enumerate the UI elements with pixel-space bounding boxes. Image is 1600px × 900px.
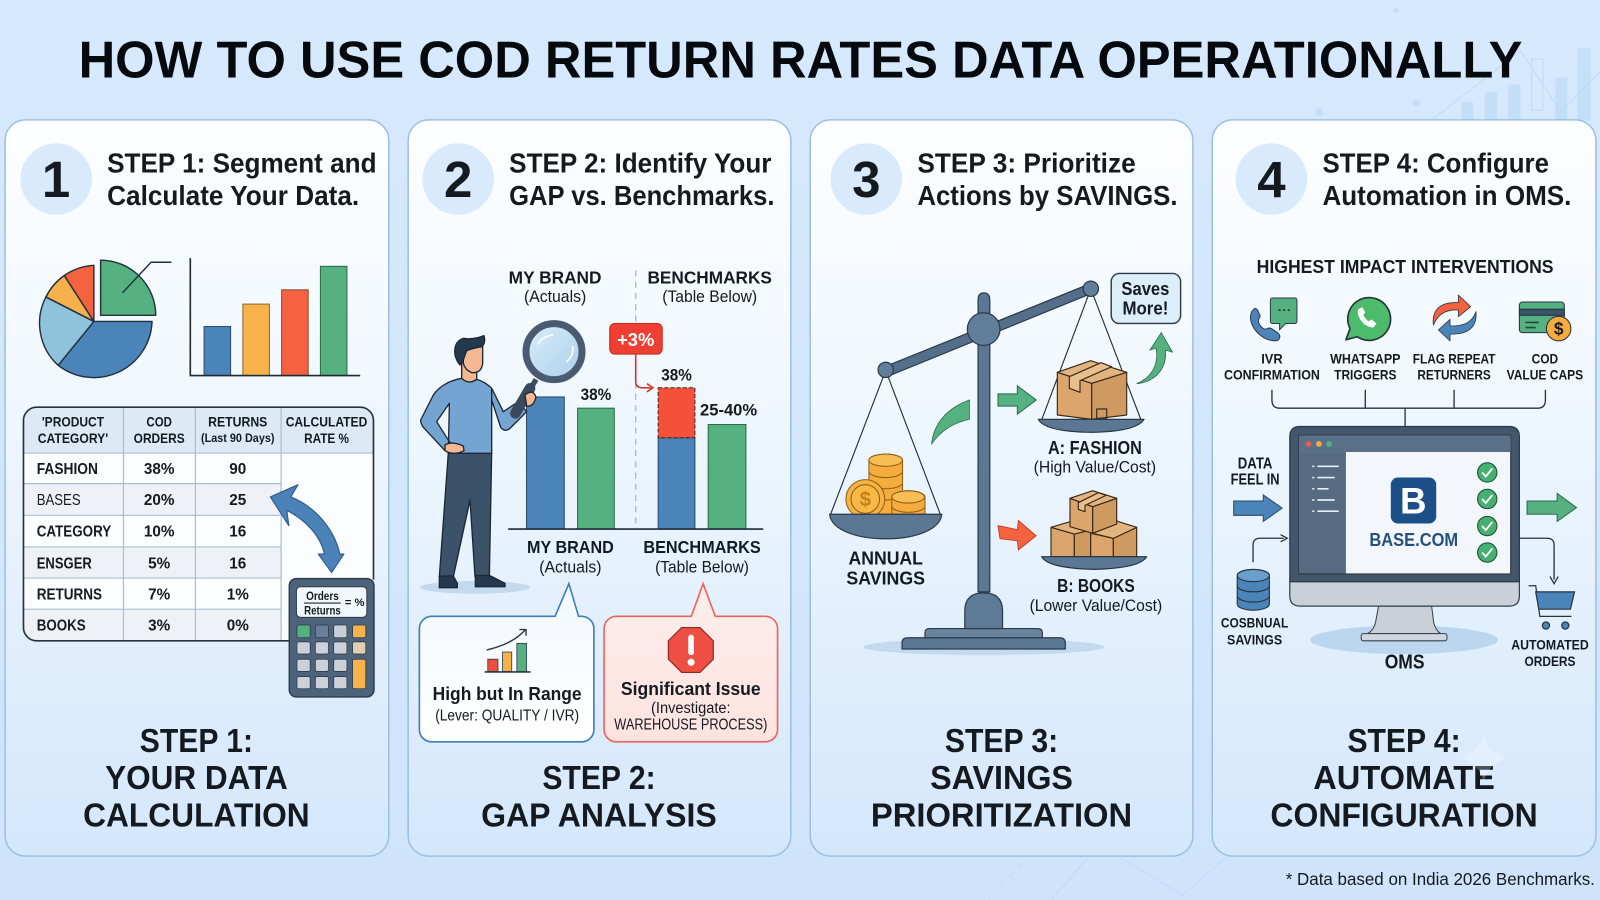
check marks <box>1478 463 1497 562</box>
calculator <box>289 579 374 697</box>
icon: whatsapp <box>1346 298 1391 340</box>
arrow: output <box>1527 493 1577 521</box>
table rows: FASHION <box>37 461 98 478</box>
calculator: Returns <box>304 603 341 617</box>
step 1 heading: STEP 1: Segment and <box>107 147 377 178</box>
icon: rising chart <box>485 630 531 672</box>
step 1 footer title: YOUR DATA <box>105 760 288 797</box>
table rows: ENSGER <box>37 555 92 572</box>
step 4 footer title: AUTOMATE <box>1313 760 1495 797</box>
left pan with coins <box>830 454 942 539</box>
table rows: 38% <box>144 461 175 478</box>
annual savings label: SAVINGS <box>846 568 925 589</box>
saves more tag <box>1111 273 1181 323</box>
label A fashion <box>1034 437 1156 476</box>
table rows: 10% <box>144 524 175 541</box>
database label: COSBNUAL <box>1221 616 1288 632</box>
right pan with box <box>1038 361 1144 432</box>
table rows: BASES <box>37 492 81 509</box>
cart label <box>1511 637 1589 670</box>
step 3 footer title <box>871 723 1132 835</box>
table header: CATEGORY' <box>38 431 108 447</box>
table rows: 5% <box>148 555 171 572</box>
intervention labels: FLAG REPEAT <box>1413 351 1496 367</box>
arrow: saves more <box>1137 333 1172 384</box>
icon: card with coin <box>1519 302 1571 341</box>
callout: significant issue: WAREHOUSE PROCESS) <box>614 717 767 734</box>
label B books: B: BOOKS <box>1057 575 1135 596</box>
step 3 footer title: SAVINGS <box>930 760 1073 797</box>
label A fashion: A: FASHION <box>1048 437 1142 458</box>
step 4 badge: 4 <box>1257 151 1286 208</box>
step 4 heading <box>1322 147 1571 211</box>
step 4 heading: STEP 4: Configure <box>1322 147 1549 178</box>
callout: high but in range: High but In Range <box>433 683 582 704</box>
annual savings label <box>846 547 925 589</box>
intervention labels: COD <box>1532 351 1558 367</box>
database label: SAVINGS <box>1227 632 1282 648</box>
intervention labels: IVR <box>1261 351 1283 367</box>
data feed label: DATA <box>1238 455 1272 472</box>
curved double arrow <box>270 485 344 572</box>
table rows: BOOKS <box>37 618 86 635</box>
icon: card with coin: $ <box>1554 319 1564 339</box>
arrow: curved leaf <box>932 400 969 444</box>
database icon <box>1237 569 1269 610</box>
BASE.COM logo <box>1391 478 1436 523</box>
column labels <box>509 268 772 306</box>
arrow: fashion <box>998 386 1036 414</box>
table rows <box>37 461 249 635</box>
label B books: (Lower Value/Cost) <box>1030 597 1162 615</box>
step 1 footer title: STEP 1: <box>140 723 253 760</box>
left pan with coins: $ <box>860 489 872 511</box>
intervention labels: VALUE CAPS <box>1507 368 1583 384</box>
label B books <box>1030 575 1162 615</box>
+3% gap badge <box>610 323 662 392</box>
gap bar chart <box>508 367 763 576</box>
step 2 heading: STEP 2: Identify Your <box>509 147 772 178</box>
table header: RATE % <box>304 431 349 447</box>
interventions heading: HIGHEST IMPACT INTERVENTIONS <box>1257 256 1554 277</box>
table rows: 16 <box>229 524 246 541</box>
table rows: 3% <box>148 618 171 635</box>
bar chart <box>190 258 360 376</box>
label A fashion: (High Value/Cost) <box>1034 458 1156 476</box>
intervention labels: CONFIRMATION <box>1224 368 1320 384</box>
gap bar chart: (Table Below) <box>655 558 749 576</box>
intervention labels: TRIGGERS <box>1334 368 1396 384</box>
callout: high but in range: (Lever: QUALITY / IVR) <box>435 707 579 724</box>
step 3 footer title: PRIORITIZATION <box>871 798 1132 835</box>
cart icon <box>1529 586 1574 629</box>
monitor: OMS <box>1290 427 1519 673</box>
magnifying glass <box>515 324 582 413</box>
table header: COD <box>146 415 172 431</box>
table rows: 25 <box>229 492 247 509</box>
data feed label: FEEL IN <box>1231 472 1280 489</box>
table rows: 7% <box>148 586 171 603</box>
step 4 badge <box>1236 143 1307 215</box>
table header: CALCULATED <box>286 415 367 431</box>
column labels: (Table Below) <box>662 288 757 306</box>
saves more tag: More! <box>1122 297 1168 318</box>
step 1 footer title <box>83 723 310 835</box>
person with magnifying glass <box>420 336 530 594</box>
calculator: Orders <box>306 589 339 603</box>
icon: IVR phone <box>1251 298 1297 341</box>
right lower pan with boxes <box>1042 491 1147 569</box>
monitor: OMS: BASE.COM <box>1369 529 1458 550</box>
callout: significant issue <box>604 584 778 742</box>
step 2 footer title: GAP ANALYSIS <box>481 798 717 835</box>
table header <box>38 415 367 447</box>
column labels: BENCHMARKS <box>647 268 772 288</box>
step 3 heading: STEP 3: Prioritize <box>917 147 1136 178</box>
callout: significant issue: Significant Issue <box>621 678 761 699</box>
table rows: 0% <box>227 618 249 635</box>
panel: step 2 <box>408 120 791 856</box>
footnote: * Data based on India 2026 Benchmarks. <box>1286 869 1595 889</box>
callout: high but in range <box>419 584 594 742</box>
cart label: ORDERS <box>1524 654 1576 670</box>
step 3 heading: Actions by SAVINGS. <box>917 180 1178 211</box>
step 3 heading <box>917 147 1178 211</box>
data table <box>23 407 373 641</box>
table header: ORDERS <box>134 431 185 447</box>
step 4 heading: Automation in OMS. <box>1322 180 1571 211</box>
intervention labels: WHATSAPP <box>1330 351 1401 367</box>
title: HOW TO USE COD RETURN RATES DATA OPERATIONALLY <box>79 32 1522 90</box>
table rows: 90 <box>229 461 246 478</box>
cart label: AUTOMATED <box>1511 637 1589 653</box>
table rows: 20% <box>144 492 175 509</box>
column labels: (Actuals) <box>524 288 586 306</box>
table header: RETURNS <box>208 415 267 431</box>
intervention labels: RETURNERS <box>1417 368 1491 384</box>
annual savings label: ANNUAL <box>848 547 923 568</box>
gap bar chart: 38% <box>581 386 612 404</box>
table rows: 16 <box>229 555 246 572</box>
icon: flag repeat arrows <box>1433 295 1476 341</box>
step 1 badge <box>20 143 92 215</box>
gap bar chart: 25-40% <box>700 401 758 419</box>
gap bar chart: 38% <box>661 367 692 385</box>
step 3 footer title: STEP 3: <box>945 723 1058 760</box>
column labels: MY BRAND <box>509 268 602 288</box>
step 2 footer title: STEP 2: <box>542 760 656 797</box>
arrow: data in <box>1234 495 1282 521</box>
step 4 footer title: STEP 4: <box>1347 723 1461 760</box>
intervention labels <box>1224 351 1583 384</box>
gap bar chart: BENCHMARKS <box>643 537 761 557</box>
step 2 footer title <box>481 760 717 835</box>
step 2 badge: 2 <box>444 151 472 208</box>
table header: (Last 90 Days) <box>201 431 274 445</box>
step 3 badge <box>831 143 902 215</box>
arrow: books <box>998 520 1036 550</box>
table rows: 1% <box>227 586 249 603</box>
step 1 footer title: CALCULATION <box>83 798 310 835</box>
calculator: = % <box>345 597 365 609</box>
database label <box>1221 616 1288 648</box>
step 2 badge <box>422 143 494 215</box>
step 1 heading <box>107 147 377 211</box>
data feed label <box>1231 455 1280 489</box>
connector: database to monitor <box>1253 535 1287 562</box>
icon: warning octagon <box>668 628 713 672</box>
panel: step 4 <box>1212 120 1596 856</box>
table rows: CATEGORY <box>37 524 111 541</box>
step 1 badge: 1 <box>42 151 70 208</box>
step 3 badge: 3 <box>852 151 881 208</box>
step 2 heading: GAP vs. Benchmarks. <box>509 180 774 211</box>
pie chart <box>40 260 171 378</box>
monitor: OMS: OMS <box>1385 651 1424 673</box>
panel: step 1 <box>5 120 389 856</box>
step 1 heading: Calculate Your Data. <box>107 180 359 211</box>
BASE.COM logo: B <box>1400 480 1427 521</box>
panel: step 3 <box>810 120 1193 856</box>
callout: significant issue: (Investigate: <box>651 700 731 717</box>
step 4 footer title <box>1270 723 1538 835</box>
table header: 'PRODUCT <box>42 415 104 431</box>
step 2 heading <box>509 147 774 211</box>
balance scale <box>831 281 1141 655</box>
+3% gap badge: +3% <box>617 329 654 350</box>
table rows: RETURNS <box>37 586 102 603</box>
step 4 footer title: CONFIGURATION <box>1270 798 1538 835</box>
saves more tag: Saves <box>1121 278 1169 299</box>
connector: monitor to cart <box>1519 538 1558 584</box>
gap bar chart: MY BRAND <box>527 537 614 557</box>
gap bar chart: (Actuals) <box>539 558 602 576</box>
